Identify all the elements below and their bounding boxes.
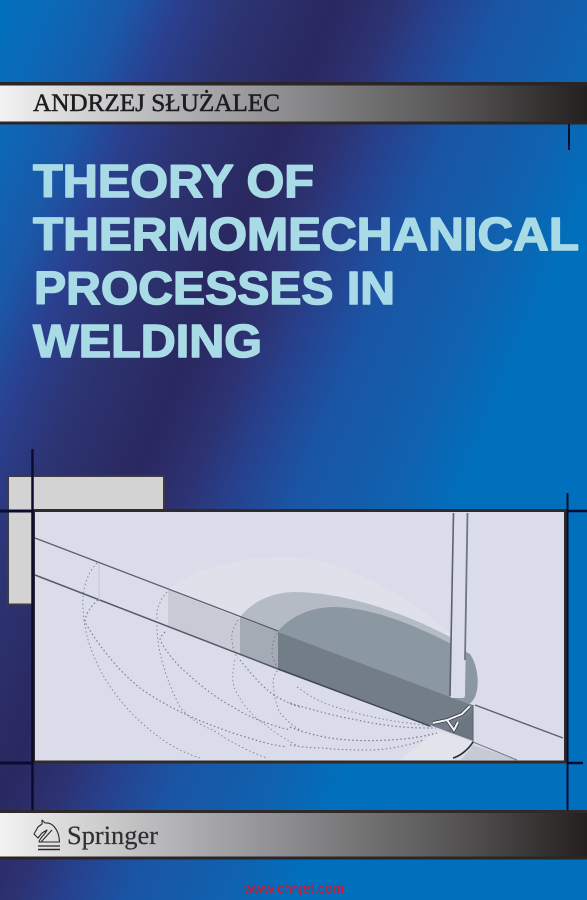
author band	[0, 82, 587, 124]
dark wedge under weld	[446, 713, 472, 740]
panel frame	[34, 510, 566, 762]
weld pool detail	[433, 705, 473, 758]
grey L-shaped block	[8, 476, 164, 604]
title: PROCESSES IN	[34, 262, 395, 314]
outer heat zone	[168, 557, 452, 680]
title: WELDING	[33, 315, 262, 367]
middle heat zone	[240, 592, 452, 690]
author name: ANDRZEJ SŁUŻALEC	[33, 90, 280, 117]
publisher band	[0, 810, 587, 860]
front face: mid section	[240, 618, 278, 669]
title	[33, 155, 579, 367]
dark edge of weld section	[278, 669, 430, 726]
front face: light section	[168, 590, 240, 655]
inner heat zone	[278, 607, 478, 722]
dashed isotherm arcs	[83, 563, 437, 758]
title: THEORY OF	[33, 155, 314, 207]
front face: dark section	[278, 632, 473, 741]
plate edge lines	[35, 538, 563, 738]
lower right surface	[400, 731, 473, 760]
publisher name: Springer	[67, 821, 158, 850]
welding electrode	[450, 513, 468, 698]
watermark url: www.chnjet.com	[243, 881, 344, 896]
title: THERMOMECHANICAL	[33, 208, 579, 260]
icon: Springer horse	[34, 820, 60, 850]
crop mark lines	[0, 124, 587, 811]
welding diagram panel	[34, 510, 566, 762]
